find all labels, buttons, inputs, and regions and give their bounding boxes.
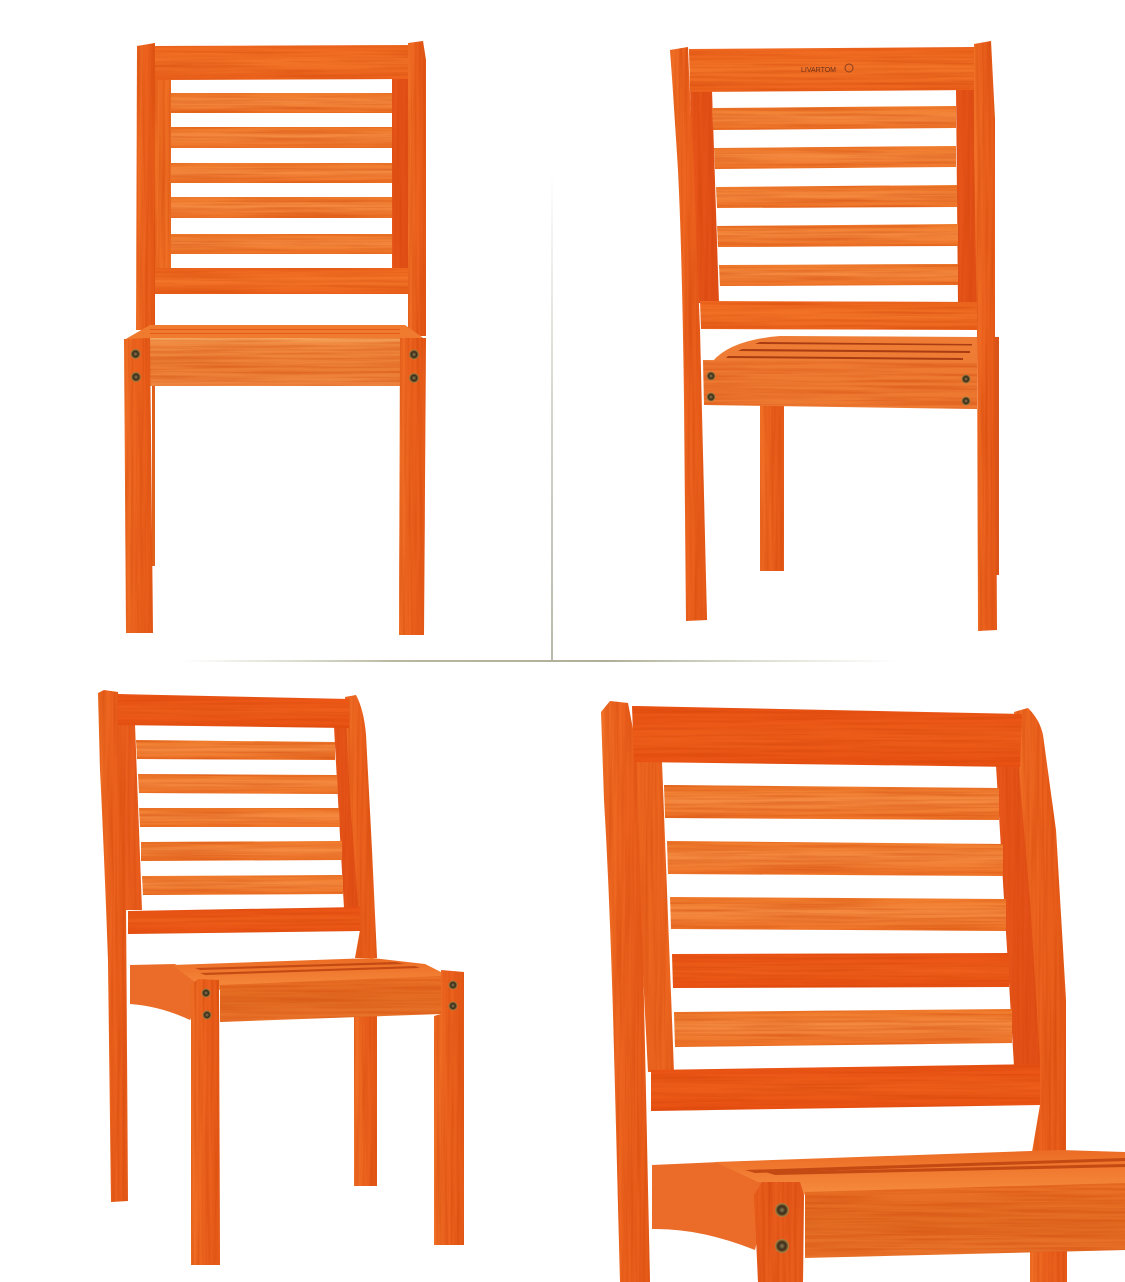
seat slat gaps xyxy=(726,342,972,360)
back right leg xyxy=(354,1016,377,1186)
bolts xyxy=(130,349,419,383)
seat slat gaps xyxy=(195,962,420,975)
seat front apron xyxy=(150,338,400,386)
seat grooves xyxy=(150,329,400,334)
left upright xyxy=(601,701,650,1282)
panel: angled front view chair xyxy=(670,41,999,631)
top rail xyxy=(118,694,349,728)
background divider lines xyxy=(180,170,900,662)
lower back rail xyxy=(700,301,977,330)
seat side apron xyxy=(652,1162,770,1250)
seat side apron xyxy=(130,964,210,1020)
seat top xyxy=(124,325,426,346)
lower back rail xyxy=(651,1064,1040,1111)
inner back frame xyxy=(116,725,362,910)
front right leg xyxy=(399,338,426,635)
far back leg xyxy=(760,405,784,571)
inner back frame xyxy=(155,78,408,270)
left upright xyxy=(98,690,128,1202)
right upright xyxy=(974,41,997,631)
front right leg xyxy=(434,970,464,1245)
seat top xyxy=(172,958,441,990)
inner back frame xyxy=(690,88,978,303)
inner back frame xyxy=(632,760,1044,1072)
back slats xyxy=(712,106,958,286)
seat slat gaps xyxy=(745,1158,1125,1175)
lower back rail xyxy=(155,268,408,294)
back slats xyxy=(136,740,343,895)
right upright xyxy=(1014,708,1066,1152)
rear edge strip xyxy=(995,337,999,575)
seat top xyxy=(715,1150,1125,1195)
top rail xyxy=(689,47,974,92)
left upright xyxy=(670,47,707,621)
front leg xyxy=(754,1182,804,1282)
top rail xyxy=(632,706,1022,767)
panel: front view chair xyxy=(124,41,426,635)
seat front apron xyxy=(220,976,441,1022)
back slats xyxy=(171,93,392,254)
lower back rail xyxy=(128,907,360,934)
right back upright xyxy=(408,41,426,336)
back leg hint xyxy=(152,386,155,566)
seat side apron xyxy=(703,360,977,409)
maker stamp: LIVARTOM xyxy=(801,67,836,74)
right upright xyxy=(345,695,377,958)
bolts xyxy=(706,372,970,406)
left back upright xyxy=(136,43,155,330)
panel: three-quarter view chair xyxy=(98,690,464,1265)
back slats xyxy=(664,785,1012,1047)
seat front apron xyxy=(805,1183,1125,1258)
panel: close-up chair xyxy=(601,701,1125,1282)
back leg xyxy=(1030,1250,1067,1282)
maker stamp xyxy=(801,64,853,74)
seat top xyxy=(712,336,977,366)
bolts xyxy=(202,980,458,1020)
bolts xyxy=(775,1203,789,1253)
front left leg xyxy=(124,338,153,633)
front left leg xyxy=(191,979,220,1265)
top rail xyxy=(155,45,408,80)
